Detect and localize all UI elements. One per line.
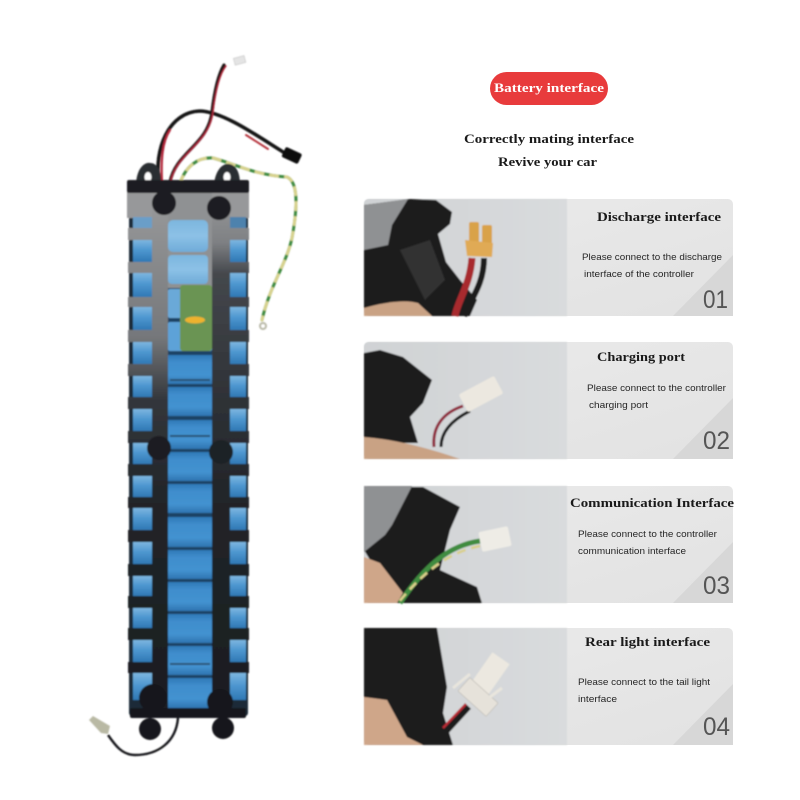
card background — [364, 342, 733, 459]
instructions line 2: interface of the controller — [584, 269, 694, 280]
number: 03 — [703, 572, 730, 600]
panel title: Rear light interface — [585, 634, 710, 649]
number: 02 — [703, 427, 730, 455]
rubber pad: middle right — [209, 440, 233, 464]
vertical strip: left — [152, 192, 169, 712]
instructions line 1: Please connect to the controller — [578, 529, 717, 540]
battery pack photo — [89, 56, 302, 755]
triangle accent — [673, 255, 733, 316]
connector: black discharge plug — [281, 147, 302, 164]
mounting ear: top left — [136, 163, 161, 184]
top dark edge band — [127, 180, 249, 193]
mounting ear: top right — [214, 164, 240, 184]
panel: rear light interface — [364, 628, 733, 745]
gray tape top section — [127, 192, 249, 218]
connector: ring terminal — [260, 323, 266, 329]
rubber pad: top left — [152, 191, 176, 215]
badge: Battery interface: Battery interface — [494, 81, 605, 95]
photo: communication connector — [364, 486, 567, 603]
connector: bottom metal terminal — [89, 716, 110, 734]
triangle accent — [673, 684, 733, 745]
heading line 2: Revive your car — [498, 154, 597, 169]
rubber pad: bottom right — [207, 689, 233, 715]
panel: charging port — [364, 342, 733, 459]
triangle accent — [673, 542, 733, 603]
mounting ear: bottom left — [139, 718, 161, 740]
photo: discharge connector — [364, 199, 567, 316]
triangle accent — [673, 398, 733, 459]
cell barcode labels — [170, 379, 210, 665]
bottom dark edge band — [130, 708, 246, 718]
panel: communication interface — [364, 486, 734, 603]
rubber pad: middle left — [147, 436, 171, 460]
heading line 1: Correctly mating interface — [464, 131, 634, 146]
battery body — [129, 190, 248, 716]
wire: red and black charging leads — [162, 65, 226, 182]
panel title: Communication Interface — [570, 495, 734, 510]
instructions line 1: Please connect to the tail light — [578, 677, 710, 688]
instructions line 2: interface — [578, 694, 617, 705]
photo: rear light connector — [364, 628, 567, 745]
instructions line 1: Please connect to the discharge — [582, 252, 722, 263]
card background — [364, 628, 733, 745]
instructions line 2: communication interface — [578, 546, 686, 557]
panel: discharge interface — [364, 199, 733, 316]
connector: small white plug — [233, 56, 246, 65]
mounting ear: bottom right — [212, 717, 234, 739]
side cells — [133, 217, 246, 700]
card background — [364, 486, 733, 603]
number: 01 — [703, 286, 728, 314]
rubber pad: top right — [207, 196, 231, 220]
photo: charging connector — [364, 342, 567, 459]
right strips — [212, 192, 249, 712]
rubber pad: bottom left — [139, 684, 167, 712]
number: 04 — [703, 713, 730, 741]
badge: Battery interface — [490, 72, 608, 105]
vertical strip: right — [212, 192, 230, 712]
card background — [364, 199, 733, 316]
instructions line 1: Please connect to the controller — [587, 383, 726, 394]
yellow solder mark — [185, 316, 205, 324]
center cell column — [168, 192, 212, 717]
wire: bottom black lead — [108, 718, 178, 755]
panel title: Discharge interface — [597, 209, 721, 224]
wire: green and yellow communication cable — [180, 158, 296, 320]
green insulation patch — [180, 285, 212, 351]
panel title: Charging port — [597, 349, 686, 364]
left strips — [128, 192, 169, 712]
wire: black discharge cable — [158, 65, 296, 320]
instructions line 2: charging port — [589, 400, 648, 411]
